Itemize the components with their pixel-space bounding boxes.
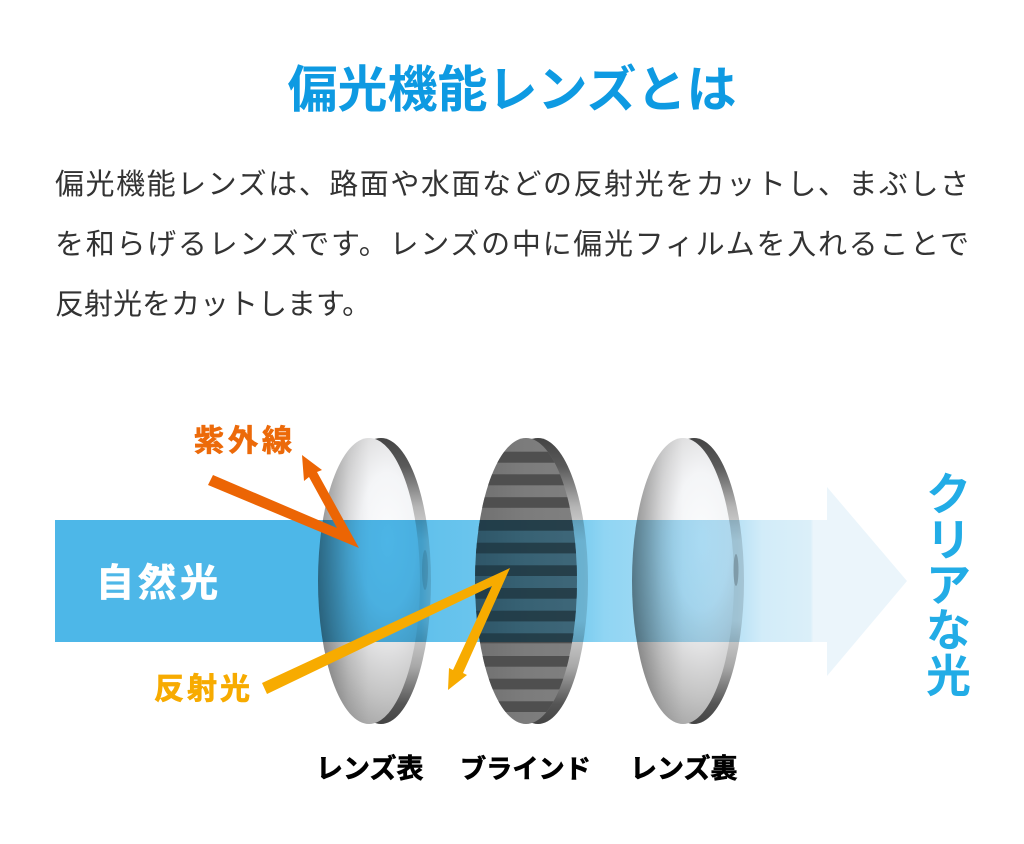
lens front [318,438,431,724]
description text: を和らげるレンズです。レンズの中に偏光フィルムを入れることで [55,229,969,261]
arrow: ultraviolet [208,455,359,548]
label: clear light: ア [926,560,971,611]
description text [55,169,969,321]
label: clear light: ク [926,469,971,520]
blind [470,438,588,724]
label: ultraviolet: 紫外線 [194,425,296,458]
label: clear light: 光 [926,651,971,702]
title: 偏光機能レンズとは [288,62,736,118]
lens back [632,438,744,724]
label: natural light: 自然光 [96,563,222,605]
label: clear light: な [926,605,971,656]
description text: 反射光をカットします。 [55,289,371,321]
diagram [55,424,970,781]
light beam arrow [55,487,907,676]
label: lens front: レンズ表 [316,753,423,784]
label: blind: ブラインド [460,754,591,784]
arrow: reflected light [262,568,510,694]
label: reflected light: 反射光 [154,673,253,706]
label: lens back: レンズ裏 [630,753,737,784]
label: clear light: リ [926,515,971,566]
description text: 偏光機能レンズは、路面や水面などの反射光をカットし、まぶしさ [55,169,969,201]
